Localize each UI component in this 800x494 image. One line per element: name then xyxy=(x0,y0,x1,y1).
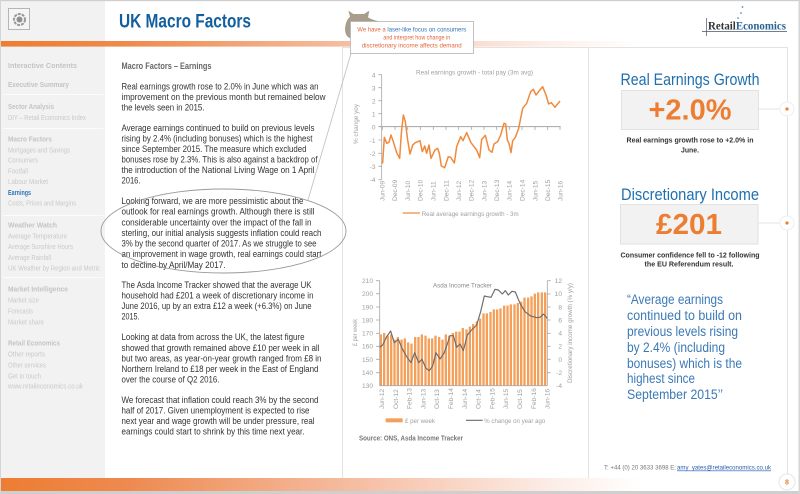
y axis labels: 1 xyxy=(372,112,376,119)
x axis labels: Oct-15 xyxy=(517,389,524,409)
article body text: since September 2015. The measure which excluded xyxy=(122,144,307,154)
sidebar navigation: DIY – Retail Economics Index xyxy=(8,115,86,122)
article body text: Average earnings continued to build on previous levels xyxy=(122,123,315,133)
article body text: Northern Ireland to £18 per week in the East of England xyxy=(122,364,319,374)
sidebar navigation: Labour Market xyxy=(8,179,48,186)
x axis labels: Jun-16 xyxy=(557,181,564,201)
chart: real earnings growth line chart: Real earnings growth - total pay (3m avg) xyxy=(416,70,533,76)
x axis labels: Jun-10 xyxy=(405,181,412,201)
sidebar navigation: Other reports xyxy=(8,352,45,358)
article body text: Macro Factors – Earnings xyxy=(122,61,212,71)
contact details xyxy=(604,464,772,472)
article body text: the levels seen in 2015. xyxy=(122,103,204,113)
sidebar navigation: Market Intelligence xyxy=(8,284,68,294)
x axis labels: Dec-13 xyxy=(494,179,501,201)
x axis labels: Dec-09 xyxy=(392,179,399,201)
x axis labels xyxy=(380,179,564,201)
chart: Asda income tracker xyxy=(353,278,574,425)
panel: discretionary income KPI: Consumer confidence fell to -12 following xyxy=(620,250,760,260)
x axis labels: Dec-14 xyxy=(519,179,526,201)
y axis labels: -2 xyxy=(370,151,376,158)
callout: laser-like focus: We have a laser-like focus on consumers xyxy=(357,26,466,33)
y axis labels: 3 xyxy=(372,85,376,92)
article body text: over the course of Q2 2016. xyxy=(122,374,220,384)
x axis labels: Jun-13 xyxy=(420,389,427,409)
panel: real earnings growth KPI: Real Earnings Growth xyxy=(620,70,760,89)
panel outlines xyxy=(342,47,788,478)
contact details: T: +44 (0) 20 3633 3698 E: xyxy=(604,464,676,472)
article body text: Looking forward, we are more pessimistic about the xyxy=(122,196,304,206)
orange header band xyxy=(1,41,641,47)
x axis labels: Oct-12 xyxy=(393,389,400,409)
sidebar navigation: www.retaileconomics.co.uk xyxy=(7,384,83,390)
x axis labels: Jun-11 xyxy=(431,181,438,201)
right axis labels: 2 xyxy=(558,344,562,350)
chart: real earnings growth line chart: Real average earnings growth - 3m xyxy=(422,211,519,218)
article body text: improvement on the previous month but remained below xyxy=(122,92,326,102)
panel: real earnings growth KPI: +2.0% xyxy=(648,94,732,126)
title: UK Macro Factors xyxy=(119,12,251,32)
sidebar navigation: Average Temperature xyxy=(8,234,67,240)
chart: real earnings growth line chart: % change yoy xyxy=(353,103,360,144)
article body text: 3% by the second quarter of 2017. As we struggle to see xyxy=(122,238,317,248)
x axis labels: Jun-15 xyxy=(503,389,510,409)
pull quote: September 2015’’ xyxy=(627,387,723,402)
left axis labels: 130 xyxy=(362,383,373,390)
sidebar navigation: Sector Analysis xyxy=(8,102,54,111)
orange footer band xyxy=(1,478,641,491)
highlight oval with connector xyxy=(101,50,352,273)
article body text: next year and wage growth will be under pressure, real xyxy=(122,416,315,426)
article body text: earnings could start to shrink by this time next year. xyxy=(122,426,304,436)
y axis labels: 4 xyxy=(372,72,376,79)
article body text: showed that growth remained above £10 per week in all xyxy=(122,343,320,353)
logo: Retail Economics: RetailEconomics xyxy=(708,20,786,32)
x axis labels: Jun-12 xyxy=(456,181,463,201)
connector marker: real earnings xyxy=(758,102,794,116)
x axis labels: Dec-10 xyxy=(418,179,425,201)
x axis labels xyxy=(379,388,552,409)
pull quote: “Average earnings xyxy=(627,292,723,307)
sidebar navigation: Macro Factors xyxy=(8,134,52,144)
left axis labels: 140 xyxy=(362,370,373,377)
chart: Asda income tracker: % change on year ago xyxy=(484,418,546,425)
x axis labels: Dec-11 xyxy=(443,180,450,201)
sidebar navigation: Average Sunshine Hours xyxy=(8,244,73,251)
x axis labels: Oct-14 xyxy=(476,389,483,409)
panel: discretionary income KPI: Discretionary Income xyxy=(621,185,759,204)
chart: Asda income tracker: £ per week xyxy=(353,318,359,346)
icon: settings gear xyxy=(8,8,30,30)
article body text: Real earnings growth rose to 2.0% in June which was an xyxy=(122,82,319,92)
chart: Asda income tracker: £ per week xyxy=(405,418,436,425)
sidebar navigation: Get in touch xyxy=(8,374,41,380)
article body text: sterling, our initial analysis suggests inflation could reach xyxy=(122,228,322,238)
article body text: bonuses rose by 2.3%. This is also against a backdrop of xyxy=(122,154,318,164)
y axis labels xyxy=(370,72,376,184)
left axis labels: 150 xyxy=(362,357,373,364)
bars: pounds per week xyxy=(376,281,551,422)
contact details: amy_yates@retaileconomics.co.uk xyxy=(677,464,772,472)
right axis labels: -2 xyxy=(556,370,562,377)
x axis labels: Oct-13 xyxy=(434,389,441,409)
article body text: household had £201 a week of discretionary income in xyxy=(122,290,314,300)
pull quote: bonuses) which is the xyxy=(627,356,742,371)
x axis labels: Feb-16 xyxy=(531,388,538,409)
y axis labels: 2 xyxy=(372,98,376,106)
sidebar navigation: Market size xyxy=(8,298,39,304)
left axis labels: 210 xyxy=(362,278,373,285)
article body text: June 2016, up by an extra £12 a week (+6.3%) on June xyxy=(122,301,312,311)
callout: laser-like focus: discretionary income affects demand xyxy=(362,42,462,49)
pull quote: continued to build on xyxy=(627,308,742,323)
x axis labels: Jun-13 xyxy=(481,181,488,201)
x axis labels: Jun-09 xyxy=(380,181,386,201)
sidebar navigation: Average Rainfall xyxy=(8,255,51,262)
panel: real earnings growth KPI: Real earnings growth rose to +2.0% in xyxy=(626,136,754,144)
sidebar navigation: Other services xyxy=(8,362,46,370)
sidebar navigation: Interactive Contents xyxy=(8,61,77,70)
right axis labels: -4 xyxy=(556,383,562,390)
pull quote: previous levels rising xyxy=(627,324,738,339)
x axis labels: Jun-14 xyxy=(462,389,469,409)
chart: real earnings growth line chart xyxy=(353,70,564,218)
sidebar navigation: Market share xyxy=(8,320,44,326)
sidebar navigation: Forecasts xyxy=(8,308,33,316)
y axis labels: -1 xyxy=(370,138,376,145)
left axis labels: 160 xyxy=(362,344,373,350)
sidebar navigation: Weather Watch xyxy=(8,220,57,230)
icon: owl mascot xyxy=(345,11,384,38)
x axis labels: Dec-15 xyxy=(545,179,552,201)
x axis labels: Feb-14 xyxy=(448,388,455,409)
left axis labels: 170 xyxy=(362,330,373,338)
article body text: 2015. xyxy=(122,312,140,322)
article body text: Looking at data from across the UK, the latest figure xyxy=(122,332,305,342)
article body text xyxy=(122,61,326,436)
article body text: We forecast that inflation could reach 3% by the second xyxy=(122,395,319,405)
page number xyxy=(779,474,795,490)
chart: Asda income tracker: Discretionary income growth (% y/y) xyxy=(568,283,574,383)
panel: real earnings growth KPI: June. xyxy=(681,146,699,154)
left axis labels: 180 xyxy=(362,318,373,324)
panel: discretionary income KPI xyxy=(620,185,760,268)
chart source: Source: ONS, Asda Income Tracker xyxy=(359,436,463,442)
article body text: an improvement in wage growth, real earnings could start xyxy=(122,249,322,259)
article body text: considerable uncertainty over the impact of the fall in xyxy=(122,217,312,227)
right axis labels: 0 xyxy=(558,357,562,364)
logo: Retail Economics xyxy=(702,6,787,36)
pull quote xyxy=(627,292,742,402)
y axis labels: -3 xyxy=(370,164,376,171)
article body text: to decline by April/May 2017. xyxy=(122,260,226,270)
article body text: rising by 2.4% (including bonuses) which is the highest xyxy=(122,134,313,144)
callout: laser-like focus xyxy=(350,22,474,54)
sidebar navigation: Mortgages and Savings xyxy=(8,148,70,154)
right axis labels: 10 xyxy=(555,291,562,298)
left axis labels: 190 xyxy=(362,304,373,312)
connector marker: discretionary income xyxy=(758,216,794,230)
x axis labels: Feb-13 xyxy=(407,388,414,409)
article body text: half of 2017. Given unemployment is expected to rise xyxy=(122,406,310,416)
sidebar background xyxy=(1,1,105,491)
x axis labels: Jun-12 xyxy=(379,389,386,409)
x axis labels: Jun-14 xyxy=(507,181,514,201)
article body text: outlook for real earnings growth. Although there is still xyxy=(122,207,315,217)
sidebar navigation: UK Weather by Region and Metric xyxy=(8,266,100,272)
x axis labels: Jun-16 xyxy=(545,389,552,409)
panel: discretionary income KPI: the EU Referendum result. xyxy=(644,260,734,268)
panel: discretionary income KPI: £201 xyxy=(656,209,722,241)
sidebar navigation: Executive Summary xyxy=(8,80,70,89)
sidebar navigation xyxy=(3,61,103,390)
right axis labels: 4 xyxy=(558,330,562,338)
x axis labels: Feb-15 xyxy=(489,388,496,409)
article body text: the introduction of the National Living Wage on 1 April xyxy=(122,165,315,175)
left axis labels xyxy=(362,278,373,390)
pull quote: highest since xyxy=(627,371,695,386)
article body text: 2016. xyxy=(122,176,140,186)
right axis labels: 8 xyxy=(558,304,562,312)
right axis labels: 12 xyxy=(555,278,562,285)
x axis labels: Dec-12 xyxy=(469,179,476,201)
right axis labels xyxy=(555,278,562,390)
article body text: but two areas, as year-on-year growth ranged from £8 in xyxy=(122,354,322,364)
chart: Asda income tracker: Asda Income Tracker xyxy=(433,282,493,290)
y axis labels: 0 xyxy=(372,125,376,132)
y axis labels: -4 xyxy=(370,177,376,184)
left axis labels: 200 xyxy=(362,291,373,298)
axes and data line xyxy=(378,75,561,213)
pull quote: by 2.4% (including xyxy=(627,340,725,355)
sidebar navigation: Footfall xyxy=(8,168,28,176)
panel: real earnings growth KPI xyxy=(620,70,760,154)
x axis labels: Jun-15 xyxy=(532,181,539,201)
right axis labels: 6 xyxy=(558,318,562,324)
sidebar navigation: Costs, Prices and Margins xyxy=(8,200,76,208)
sidebar navigation: Earnings xyxy=(8,190,31,197)
sidebar navigation: Consumers xyxy=(8,158,38,164)
callout: laser-like focus: and interpret how change in xyxy=(383,34,451,41)
article body text: The Asda Income Tracker showed that the average UK xyxy=(122,280,312,290)
page number: 8 xyxy=(785,480,789,486)
sidebar navigation: Retail Economics xyxy=(8,338,60,348)
